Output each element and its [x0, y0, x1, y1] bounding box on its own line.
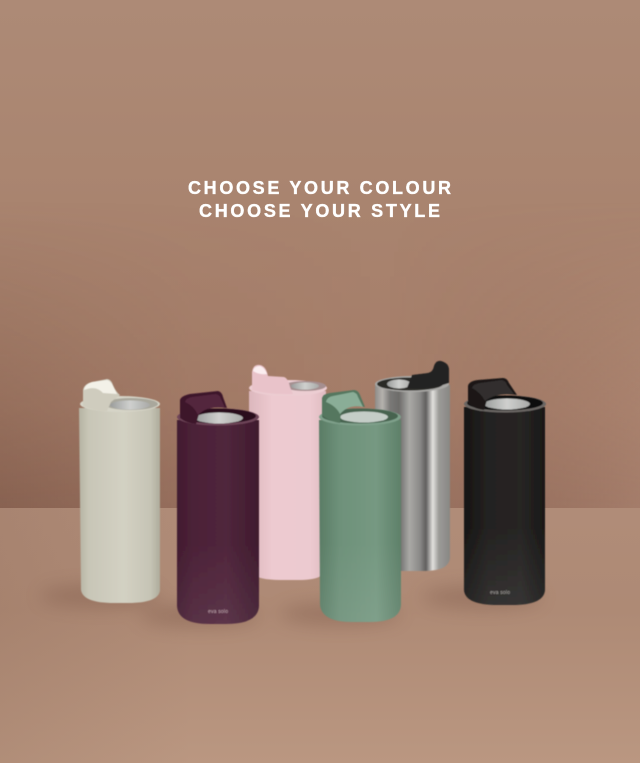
green tumbler	[319, 390, 401, 622]
plum tumbler	[177, 391, 259, 624]
cream lid highlight	[84, 380, 117, 394]
floor shadows	[40, 585, 542, 627]
pink tumbler	[249, 365, 327, 580]
background floor	[0, 508, 640, 763]
title: CHOOSE YOUR COLOUR	[188, 178, 451, 198]
plum lid inner	[185, 394, 225, 415]
black lid spout	[468, 378, 517, 410]
black lid tab	[407, 361, 449, 388]
cream lid spout	[83, 379, 120, 411]
title	[188, 178, 451, 221]
black tumbler	[464, 378, 546, 605]
black lid inner	[472, 380, 514, 401]
black brand mark: eva solo	[490, 590, 510, 596]
cream tumbler	[79, 379, 160, 603]
background wall	[0, 276, 624, 508]
plum brand mark: eva solo	[208, 609, 228, 615]
pink lid highlight	[253, 366, 267, 374]
title: CHOOSE YOUR STYLE	[199, 201, 440, 221]
pink lid spout	[252, 365, 293, 394]
steel tumbler	[375, 361, 450, 571]
plum lid spout	[180, 391, 227, 424]
green lid inner	[326, 392, 363, 414]
green lid spout	[322, 390, 365, 423]
